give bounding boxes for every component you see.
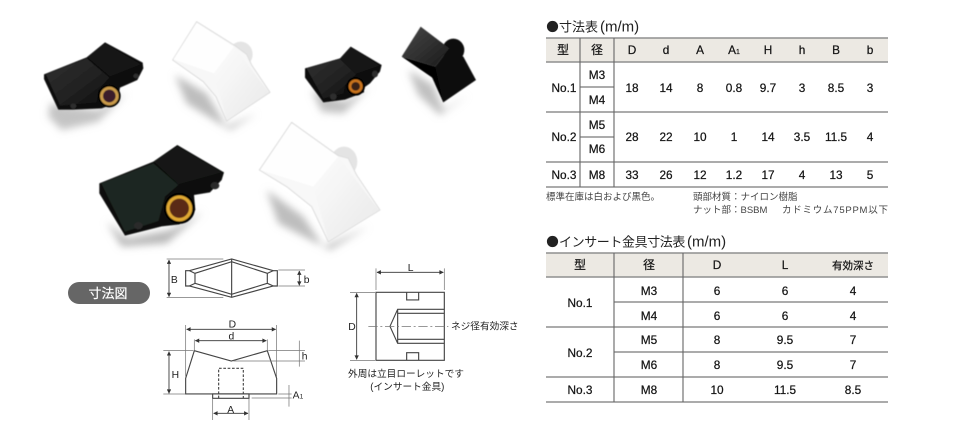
table: dimensions: 3 [799,81,806,95]
table: insert dimensions: D [713,258,721,272]
table: insert dimensions: 8 [714,333,721,347]
table: dimensions: 17 [761,168,775,182]
table: dimensions: 10 [693,130,707,144]
table: dimensions: A1 [728,43,740,57]
label: dimension drawing pill [68,282,150,304]
table: dimensions: 9.7 [760,81,776,95]
table: insert dimensions: 6 [782,284,789,298]
table: dimensions: 14 [659,81,673,95]
table: dimensions: 3.5 [794,130,811,144]
note: materials: カドミウム75PPM以下 [782,205,888,216]
table: insert dimensions: 8 [714,358,721,372]
note: materials: 頭部材質：ナイロン樹脂 [693,191,798,203]
table: insert dimensions [546,253,888,402]
table: dimensions: A [696,43,704,57]
diagram: side view: A1 [293,391,304,402]
table: dimensions: 8.5 [828,81,845,95]
table: insert dimensions: 9.5 [777,333,794,347]
table: insert dimensions: 4 [850,309,857,323]
note: materials: ナット部：BSBM [693,205,768,216]
photo: black knob, side view [402,27,476,115]
table: dimensions: M3 [589,68,606,82]
photo: black knob, top left [44,42,143,130]
table: dimensions: No.3 [552,168,577,182]
table: dimensions: 4 [799,168,806,182]
heading: dimension table: 寸法表(m/m) [559,18,639,36]
table: dimensions: 3 [867,81,874,95]
table: dimensions: 18 [625,81,639,95]
table: dimensions: M8 [589,168,606,182]
diagram: insert: D [348,322,356,333]
diagram: top view: B [171,275,178,286]
table: dimensions: 5 [867,168,874,182]
table: insert dimensions: M3 [641,284,658,298]
table: dimensions: 13 [829,168,843,182]
heading: insert table: インサート金具寸法表(m/m) [559,234,726,250]
table: dimensions: 12 [693,168,707,182]
table: insert dimensions: L [782,258,789,272]
table: dimensions: No.1 [552,81,576,95]
table: insert dimensions: 8.5 [845,383,862,397]
table: dimensions: M6 [589,142,606,156]
diagram: insert: (インサート金具) [370,381,444,393]
table: dimensions: 径 [591,43,603,57]
table: insert dimensions: No.3 [568,383,593,397]
table: insert dimensions: 径 [643,258,655,272]
table: dimensions: h [799,43,805,57]
table: dimensions: 11.5 [825,130,847,144]
diagram: side view: d [228,331,234,342]
diagram: insert: ネジ径有効深さ [451,321,519,333]
diagram: side view: h [302,352,308,363]
table: insert dimensions: 9.5 [777,358,794,372]
diagram: top view [167,259,310,297]
diagram: side view: H [172,370,179,381]
table: insert dimensions: M6 [641,358,658,372]
table: insert dimensions: 11.5 [774,383,796,397]
table: dimensions: 型 [557,43,569,57]
table: insert dimensions: No.2 [568,346,592,360]
table: dimensions: B [832,43,840,57]
table: insert dimensions: 10 [710,383,724,397]
table: dimensions: H [764,43,772,57]
note: stock colours: 標準在庫は白および黒色。 [546,191,660,203]
table: insert dimensions: 型 [574,258,586,272]
table: dimensions: 0.8 [726,81,743,95]
diagram: top view: b [304,275,310,286]
table: dimensions: 14 [761,130,775,144]
diagram: side view [163,320,308,420]
table: dimensions [546,38,888,187]
diagram: insert [348,263,519,393]
diagram: side view: A [227,405,234,416]
table: insert dimensions: 6 [714,284,721,298]
photo: small black knob [305,47,382,113]
table: dimensions: D [628,43,636,57]
table: dimensions: 33 [625,168,639,182]
table: dimensions: 1 [731,130,737,144]
photo: large black knob [99,145,224,247]
table: insert dimensions: 7 [850,358,856,372]
table: dimensions: 22 [659,130,673,144]
table: insert dimensions: M4 [641,309,658,323]
table: insert dimensions: 6 [782,309,789,323]
diagram: side view: D [229,320,236,331]
table: dimensions: M5 [589,118,606,132]
table: dimensions: d [663,43,669,57]
label: dimension drawing pill: 寸法図 [88,286,128,301]
table: dimensions: 26 [659,168,673,182]
table: dimensions: b [867,43,874,57]
note: materials [693,191,888,216]
table: dimensions: M4 [589,93,606,107]
table: dimensions: No.2 [552,130,576,144]
table: insert dimensions: M8 [641,383,658,397]
diagram: insert: L [408,263,414,274]
table: insert dimensions: 7 [850,333,856,347]
photo: large white knob [259,122,380,250]
table: insert dimensions: No.1 [568,296,592,310]
table: dimensions: 4 [867,130,874,144]
table: dimensions: 1.2 [726,168,742,182]
table: insert dimensions: M5 [641,333,658,347]
table: insert dimensions: 4 [850,284,857,298]
table: insert dimensions: 有効深さ [832,259,874,272]
table: insert dimensions: 6 [714,309,721,323]
photo: white knob, top [173,22,270,130]
table: dimensions: 8 [697,81,704,95]
table: dimensions: 28 [625,130,639,144]
diagram: insert: 外周は立目ローレットです [348,368,464,380]
